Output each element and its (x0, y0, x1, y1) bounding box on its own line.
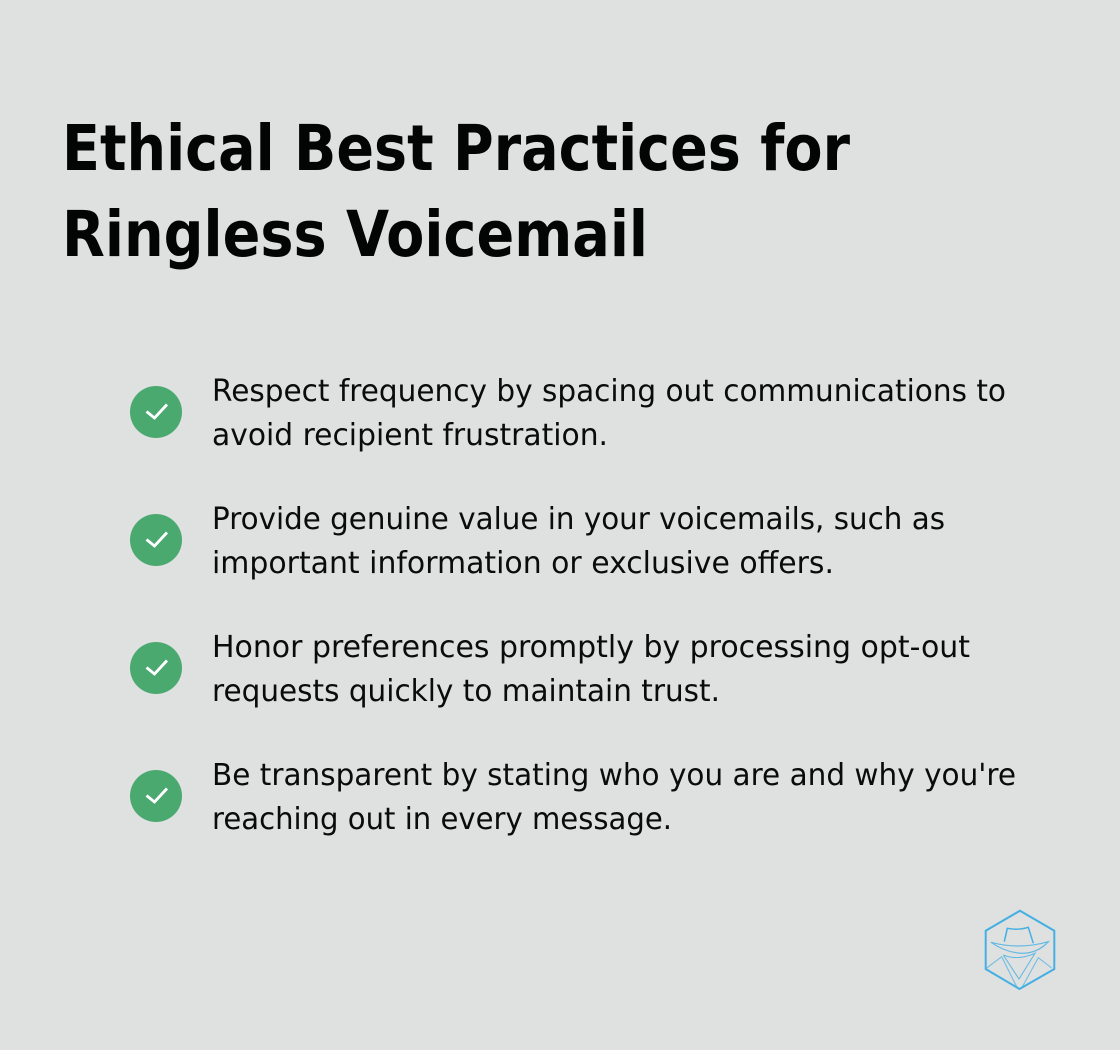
item: provide value (130, 502, 945, 581)
title: Ethical Best Practices for (62, 112, 850, 185)
checklist (130, 374, 1016, 837)
text: be transparent: Be transparent by stating who you are and why you're (212, 758, 1016, 793)
text: be transparent (212, 758, 1016, 837)
icon: hexagon logo with hat (986, 911, 1054, 989)
text: provide value: Provide genuine value in your voicemails, such as (212, 502, 945, 537)
text: provide value (212, 502, 945, 581)
text: respect frequency: Respect frequency by spacing out communications to (212, 374, 1006, 409)
icon: check badge (130, 514, 182, 566)
text: honor preferences: requests quickly to maintain trust. (212, 674, 720, 709)
icon: check badge (130, 770, 182, 822)
text: be transparent: reaching out in every message. (212, 802, 672, 837)
text: respect frequency: avoid recipient frustration. (212, 418, 608, 453)
item: honor preferences (130, 630, 970, 709)
icon: check badge (130, 642, 182, 694)
text: provide value: important information or exclusive offers. (212, 546, 834, 581)
text: honor preferences: Honor preferences promptly by processing opt-out (212, 630, 970, 665)
text: honor preferences (212, 630, 970, 709)
icon: check badge (130, 386, 182, 438)
title (62, 112, 850, 271)
item: be transparent (130, 758, 1016, 837)
title: Ringless Voicemail (62, 198, 648, 271)
text: respect frequency (212, 374, 1006, 453)
item: respect frequency (130, 374, 1006, 453)
